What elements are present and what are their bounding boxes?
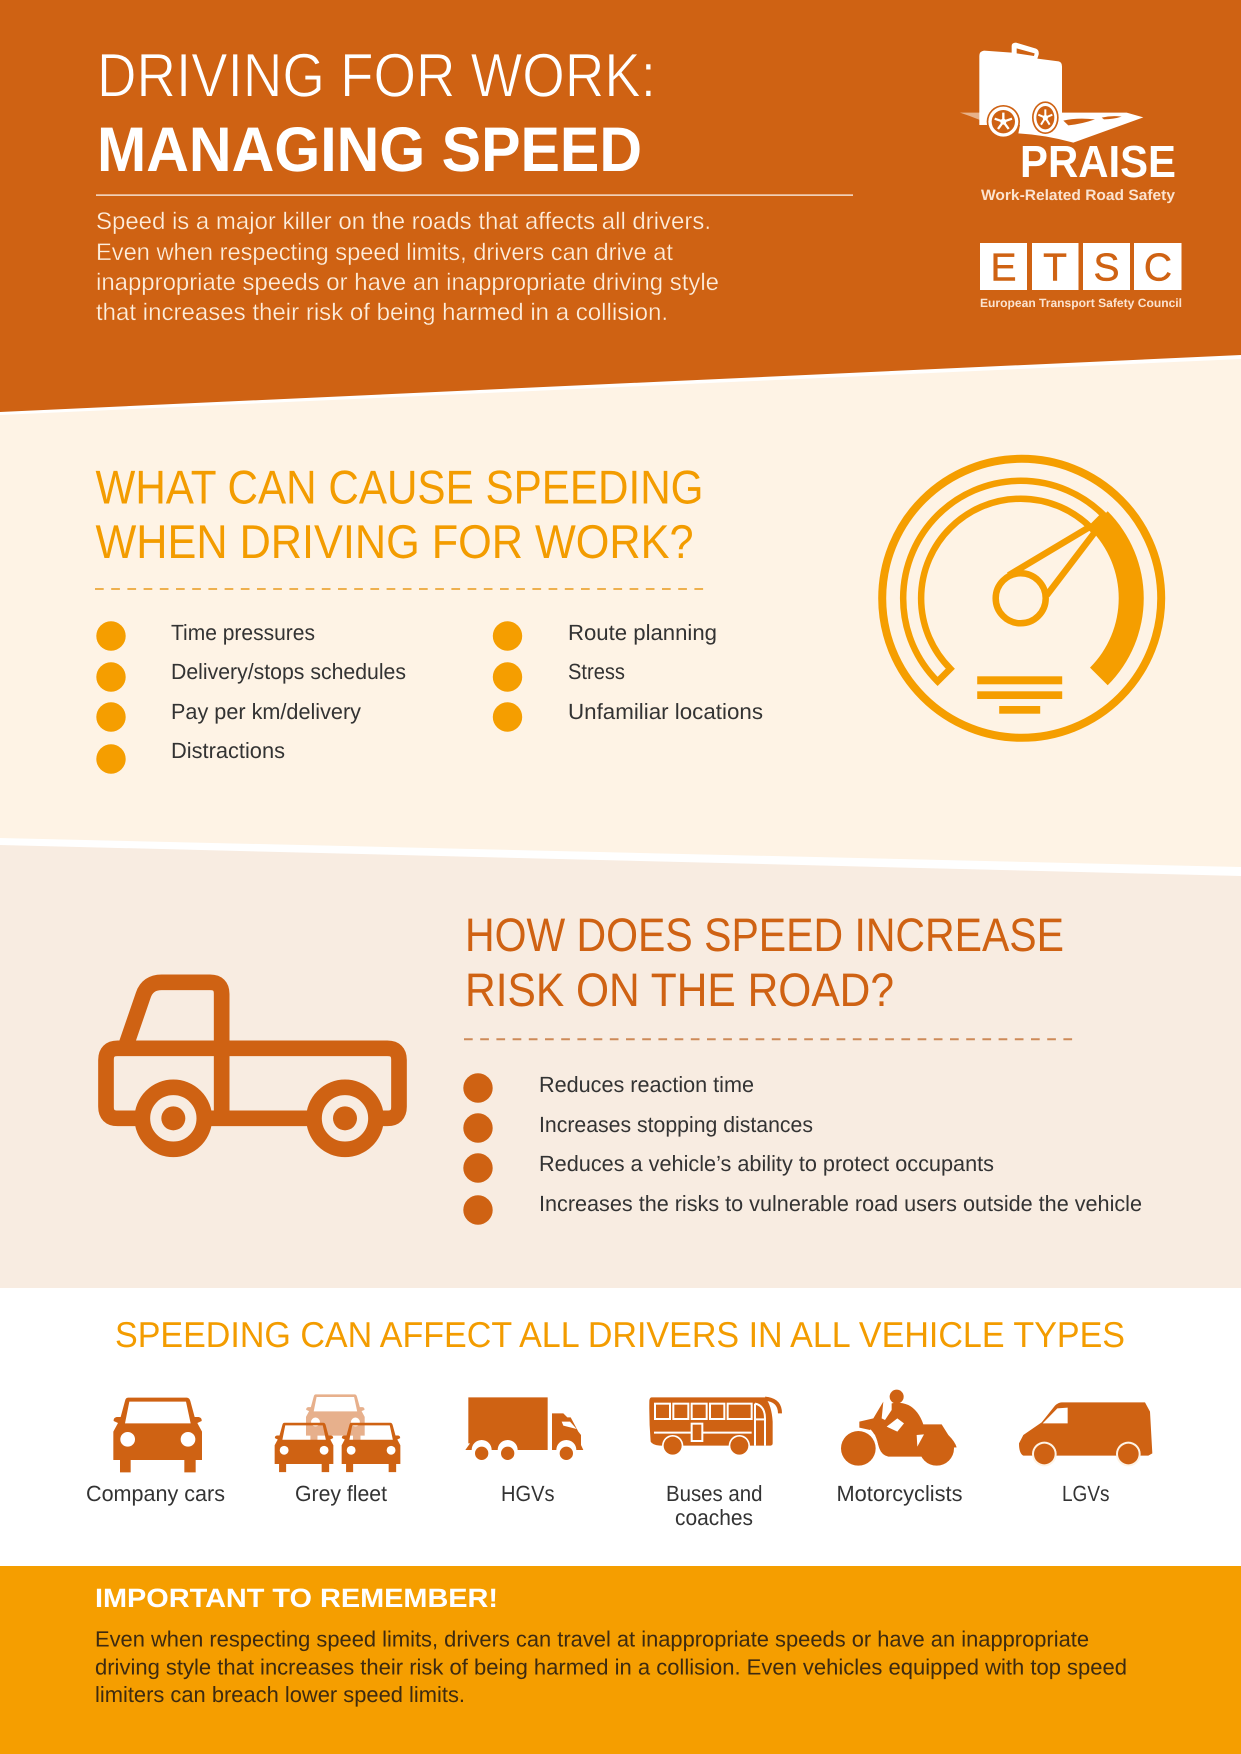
label: buses and coaches: coaches — [675, 1505, 753, 1530]
logo: ETSC: European Transport Safety Council — [980, 296, 1182, 310]
title: DRIVING FOR WORK: — [97, 42, 656, 110]
logo: ETSC: S — [1093, 246, 1120, 290]
label: buses and coaches — [666, 1481, 762, 1530]
logo: PRAISE: Work-Related Road Safety — [981, 187, 1176, 204]
heading: what can cause speeding: WHEN DRIVING FOR WORK? — [96, 516, 694, 569]
label: LGVs: LGVs — [1062, 1481, 1110, 1506]
icon: speedometer — [882, 459, 1161, 738]
label: buses and coaches: Buses and — [666, 1481, 762, 1506]
logo: ETSC — [980, 243, 1182, 310]
icon: van — [1019, 1402, 1152, 1466]
icon: HGV truck — [465, 1397, 583, 1460]
callout: important to remember: IMPORTANT TO REMEMBER! — [95, 1583, 498, 1613]
icon: company car — [113, 1398, 202, 1472]
logo: PRAISE — [960, 43, 1176, 204]
list: causes column one: Time pressures — [171, 620, 315, 645]
label: HGVs: HGVs — [501, 1481, 554, 1506]
list: risks: Increases stopping distances — [539, 1112, 813, 1137]
icon: bus — [649, 1397, 780, 1455]
intro text: inappropriate speeds or have an inappropriate driving style — [96, 269, 719, 296]
list: causes column two: Route planning — [568, 620, 717, 645]
callout: important to remember — [95, 1583, 1127, 1707]
list: causes column two — [493, 620, 763, 732]
icon: pickup truck — [106, 982, 399, 1149]
panel: header background — [0, 0, 1241, 412]
intro text: Even when respecting speed limits, drivers can drive at — [96, 239, 673, 266]
label: motorcyclists: Motorcyclists — [836, 1481, 962, 1506]
heading: what can cause speeding: WHAT CAN CAUSE SPEEDING — [96, 462, 704, 514]
heading: what can cause speeding — [96, 462, 704, 569]
callout: important to remember: driving style that increases their risk of being harmed in a collision. Even vehicles equipped with top speed — [95, 1654, 1127, 1680]
title — [97, 42, 656, 185]
heading: how does speed increase risk — [465, 908, 1064, 1016]
list: causes column one: Delivery/stops schedules — [171, 659, 406, 684]
logo: ETSC: C — [1144, 246, 1172, 290]
icon: suitcase on wheels — [960, 43, 1143, 143]
logo: ETSC: T — [1043, 246, 1067, 290]
intro text: that increases their risk of being harmed in a collision. — [96, 299, 668, 326]
heading: how does speed increase risk: RISK ON THE ROAD? — [465, 963, 894, 1016]
intro text: Speed is a major killer on the roads that affects all drivers. — [96, 208, 711, 235]
logo: ETSC: E — [990, 246, 1017, 290]
panel: risk background — [0, 845, 1241, 1288]
icon: grey fleet — [275, 1394, 400, 1472]
list: causes column one: Pay per km/delivery — [171, 699, 361, 724]
list: risks: Reduces a vehicle’s ability to protect occupants — [539, 1151, 994, 1176]
heading: speeding can affect all drivers: SPEEDING CAN AFFECT ALL DRIVERS IN ALL VEHICLE TYPES — [115, 1314, 1125, 1355]
list: risks: Reduces reaction time — [539, 1072, 754, 1097]
logo: PRAISE: PRAISE — [1020, 136, 1176, 187]
callout: important to remember: Even when respecting speed limits, drivers can travel at inappropriate speeds or have an inappropriate — [95, 1626, 1089, 1652]
list: causes column two: Stress — [568, 659, 625, 684]
intro text — [96, 208, 719, 326]
callout: important to remember: limiters can breach lower speed limits. — [95, 1682, 465, 1707]
title: MANAGING SPEED — [97, 115, 642, 185]
list: causes column one: Distractions — [171, 738, 285, 763]
label: grey fleet: Grey fleet — [295, 1481, 387, 1506]
panel: reminder background — [0, 1566, 1241, 1754]
list: causes column one — [96, 620, 406, 774]
icon: motorcyclist — [841, 1390, 957, 1466]
heading: how does speed increase risk: HOW DOES SPEED INCREASE — [465, 908, 1064, 961]
list: risks — [463, 1072, 1142, 1225]
list: causes column two: Unfamiliar locations — [568, 699, 763, 724]
list: risks: Increases the risks to vulnerable road users outside the vehicle — [539, 1191, 1142, 1216]
label: company cars: Company cars — [86, 1481, 225, 1506]
panel: causes background — [0, 359, 1241, 867]
